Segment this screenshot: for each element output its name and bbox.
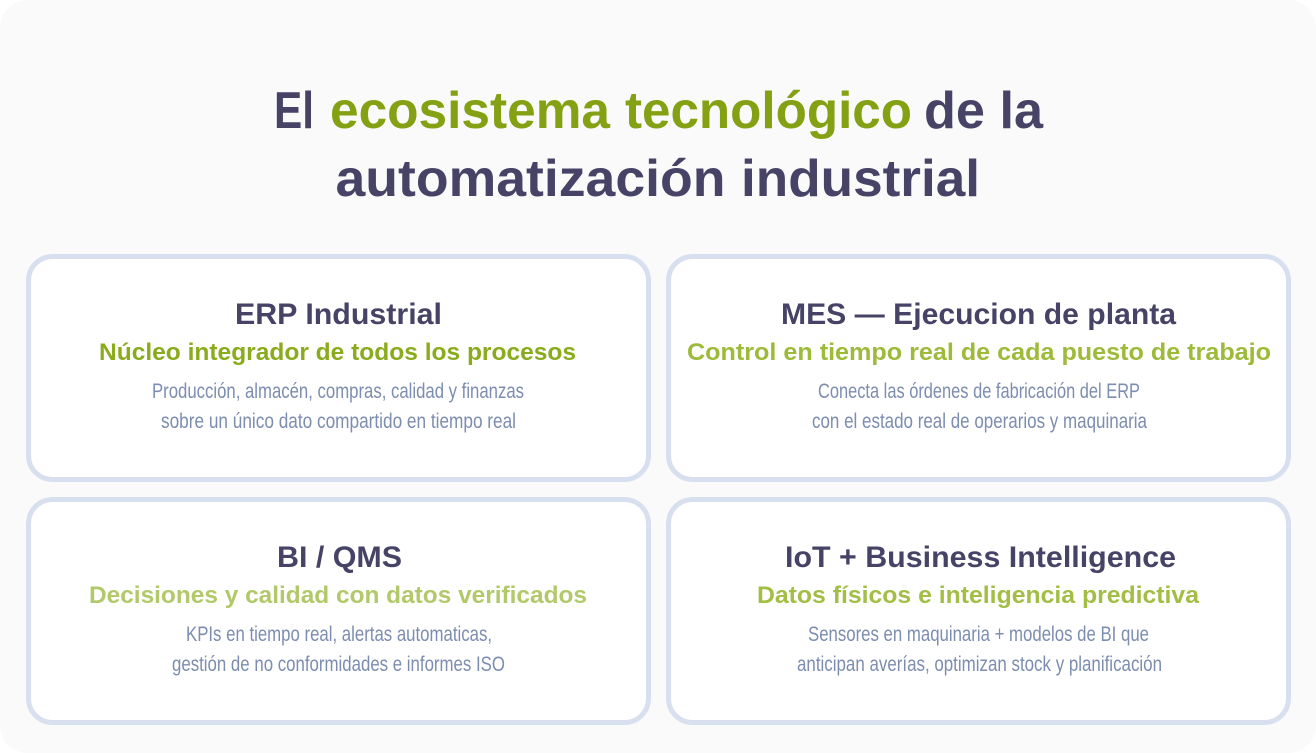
title: industrial bbox=[741, 150, 980, 208]
card description: MES: Conecta las órdenes de fabricación del ERP bbox=[818, 379, 1140, 403]
panel: ERP Industrial bbox=[28, 256, 648, 480]
card description: ERP: Producción, almacén, compras, calidad y finanzas bbox=[152, 379, 524, 403]
card subtitle: ERP: Núcleo integrador de todos los procesos bbox=[99, 339, 576, 366]
panel: BI / QMS bbox=[28, 500, 648, 722]
card description: ERP: sobre un único dato compartido en tiempo real bbox=[161, 409, 516, 433]
card description: IoT: anticipan averías, optimizan stock y planificación bbox=[797, 652, 1162, 676]
card description: IoT bbox=[797, 622, 1162, 676]
card description: BI / QMS: KPIs en tiempo real, alertas automaticas, bbox=[186, 622, 492, 646]
card heading: IoT: IoT + Business Intelligence bbox=[785, 541, 1176, 574]
title: tecnológico bbox=[625, 82, 912, 140]
card subtitle: IoT: Datos físicos e inteligencia predictiva bbox=[757, 582, 1200, 609]
panel: IoT + Business Intelligence bbox=[668, 500, 1288, 722]
panel: MES bbox=[668, 256, 1288, 480]
card subtitle: MES: Control en tiempo real de cada puesto de trabajo bbox=[687, 339, 1271, 366]
title: de la bbox=[924, 82, 1044, 140]
card heading: MES: MES — Ejecucion de planta bbox=[781, 298, 1177, 331]
card description: MES bbox=[812, 379, 1147, 433]
title bbox=[274, 82, 1044, 208]
card description: MES: con el estado real de operarios y maquinaria bbox=[812, 409, 1147, 433]
title: ecosistema bbox=[330, 82, 611, 140]
title: El bbox=[274, 82, 314, 140]
card description: ERP bbox=[152, 379, 524, 433]
card description: BI / QMS: gestión de no conformidades e informes ISO bbox=[172, 652, 505, 676]
card description: IoT: Sensores en maquinaria + modelos de BI que bbox=[808, 622, 1149, 646]
card description: BI / QMS bbox=[172, 622, 505, 676]
card heading: BI / QMS: BI / QMS bbox=[277, 541, 402, 574]
card heading: ERP Industrial: ERP Industrial bbox=[235, 298, 442, 331]
title: automatización bbox=[336, 150, 726, 208]
card subtitle: BI / QMS: Decisiones y calidad con datos verificados bbox=[89, 582, 587, 609]
